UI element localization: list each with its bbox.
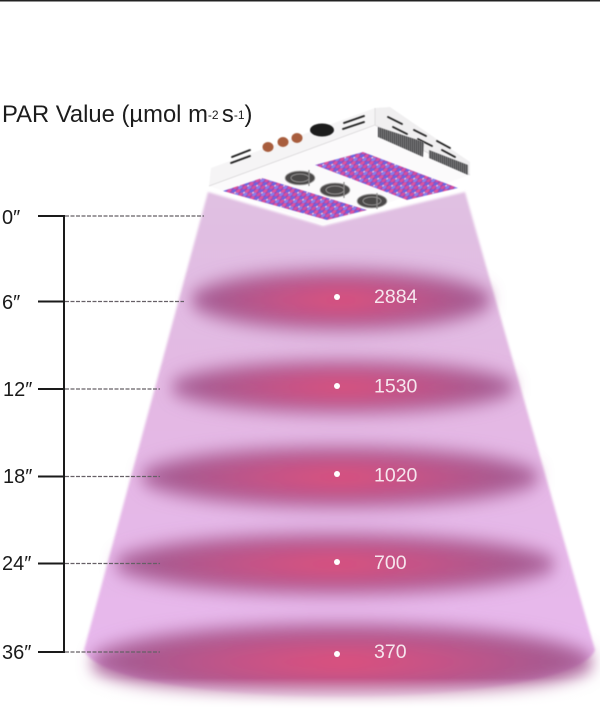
fan 3	[357, 193, 387, 209]
label 24 inch: 24″	[2, 553, 31, 575]
slots left	[231, 150, 250, 163]
value 700: 700	[374, 552, 407, 574]
top border line	[0, 0, 600, 2]
dot 24 inch	[334, 559, 340, 565]
dot 12 inch	[334, 383, 340, 389]
label 12 inch: 12″	[3, 379, 32, 401]
center dots	[334, 294, 340, 657]
PAR values	[374, 286, 418, 663]
light intensity spots	[90, 270, 594, 700]
bottom fade to white	[60, 678, 600, 708]
value 1020: 1020	[374, 464, 418, 486]
label 18 inch: 18″	[3, 466, 32, 488]
control knobs	[262, 133, 302, 152]
value 2884: 2884	[374, 286, 418, 308]
dot 18 inch	[334, 471, 340, 477]
spot: 24 inch	[114, 534, 556, 594]
height labels	[2, 207, 32, 664]
vertical axis line	[63, 215, 65, 653]
title: )	[244, 101, 252, 128]
grille 1	[378, 127, 424, 157]
title: -2	[208, 108, 222, 122]
spot: 6 inch	[190, 270, 492, 330]
spot: 18 inch	[140, 447, 540, 507]
cooling fans	[285, 170, 387, 209]
dot 36 inch	[334, 651, 340, 657]
spot: 36 inch	[90, 624, 594, 700]
title: s	[222, 101, 234, 128]
vent slots	[231, 116, 455, 163]
tick marks	[38, 216, 64, 652]
fan 1	[285, 170, 315, 186]
LED panel: front	[223, 178, 367, 220]
grow light fixture	[209, 107, 470, 225]
light beam	[84, 192, 595, 697]
label 6 inch: 6″	[2, 292, 20, 314]
dot 6 inch	[334, 294, 340, 300]
right face	[375, 107, 470, 175]
knob 2	[278, 137, 288, 147]
grille 2	[429, 150, 468, 175]
LED panel: back	[315, 152, 458, 200]
slots center	[343, 116, 364, 129]
label 36 inch: 36″	[2, 642, 31, 664]
title: -1	[234, 108, 245, 122]
body crease	[209, 108, 470, 186]
knob 1	[262, 142, 274, 152]
knob 3	[292, 133, 302, 143]
dashed guide lines	[65, 216, 204, 652]
label 0 inch: 0″	[2, 207, 20, 229]
value 1530: 1530	[374, 376, 418, 398]
left face	[209, 108, 375, 186]
heat sink grilles	[378, 127, 468, 175]
height scale axis	[38, 215, 204, 653]
title: PAR Value (µmol m	[2, 101, 208, 128]
spot: 12 inch	[170, 361, 516, 413]
fan 2	[320, 182, 350, 198]
value 370: 370	[374, 641, 407, 663]
slots right	[388, 117, 455, 157]
power switch	[310, 124, 334, 136]
fixture body	[209, 107, 470, 225]
underside	[209, 125, 470, 225]
